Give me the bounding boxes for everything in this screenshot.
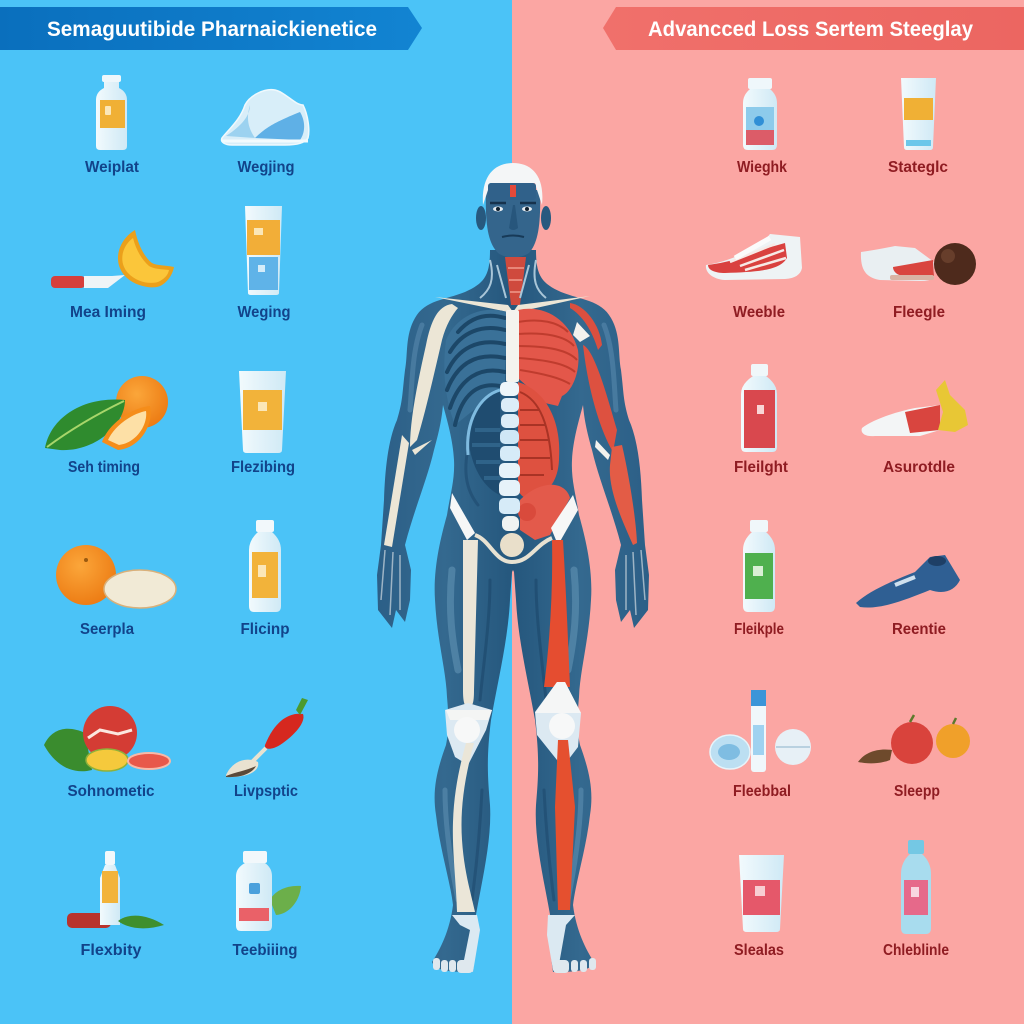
left item: fruit and leaves [44,706,170,800]
right item: green bottle [734,520,784,638]
sternum [506,310,519,382]
red rib cage [518,309,579,406]
right item: white shoe and yellow accent: Asurotdle [883,459,955,476]
right header banner: Advancced Loss Sertem Steeglay [648,18,973,41]
left item: leaf and oranges: Seh timing [68,459,140,476]
right item: tall bottle: Chleblinle [883,942,949,959]
right item: apple and orange: Sleepp [894,783,940,800]
left item: bottle and leaf: Teebiiing [232,942,298,959]
right item: apple and orange [858,715,970,800]
left item: red pepper and spoon: Livpsptic [234,783,298,800]
right item: blue inhaler [856,555,960,638]
left item: tall glass [238,206,290,321]
left item: orange and rice disc: Seerpla [80,621,134,638]
right item: white sneaker and brown fruit: Fleegle [893,304,945,321]
right item: glass: Stateglc [888,159,948,176]
right header banner [603,7,1024,50]
right knee [535,682,581,768]
right item: glass [888,78,948,176]
right item: bottle: Wieghk [737,159,787,176]
right item: pink glass: Slealas [734,942,784,959]
body silhouette left half [377,250,513,972]
left abdominal organs [468,390,500,495]
right arm muscles [570,303,637,545]
left item: bottle and leaf [232,851,301,959]
left item: leaf and oranges [45,376,168,476]
left item: tall glass: Weging [238,304,290,321]
left foot [433,915,480,973]
right item: green bottle: Fleikple [734,621,784,638]
left item: orange and rice disc [56,545,176,638]
throat and neck tendons [480,257,546,305]
muscle shading [410,325,616,900]
left rib cage [444,310,507,425]
left item: fruit and leaves: Sohnometic [68,783,155,800]
collarbones [435,296,590,312]
right item: striped sneaker: Weeble [733,304,785,321]
red intestines [518,382,570,540]
left arm bones [384,304,458,547]
left item: blue shoe [222,90,309,176]
panel: right pink background [512,0,1024,1024]
right thigh muscle [544,540,570,687]
left knee [445,703,492,765]
panel: left blue background [0,0,512,1024]
left item: juice glass [231,371,295,476]
left shin bone [453,743,475,912]
left item: blue shoe: Wegjing [238,159,294,176]
left header banner: Semaguutibide Pharnaickienetice [47,18,377,41]
right item: pink glass [734,855,784,959]
left item: small bottle, capsule and leaf: Flexbity [80,942,142,959]
body silhouette right half [513,250,649,972]
spine [499,382,520,531]
head [476,163,551,258]
left item: spoon and orange wedge [51,230,174,321]
right item: red bottle [734,364,789,476]
hands [381,550,645,615]
left femur [463,540,478,707]
right shin muscle [555,740,575,910]
right item: striped sneaker [706,234,802,321]
right item: tall bottle [883,840,949,959]
left item: spoon and orange wedge: Mea Iming [70,304,146,321]
left item: small bottle, capsule and leaf [67,851,164,959]
right item: pills and tube [710,690,811,800]
left item: bottle: Weiplat [85,159,140,176]
right item: white sneaker and brown fruit [861,243,976,321]
right foot [547,915,596,973]
right item: pills and tube: Fleebbal [733,783,791,800]
right item: red bottle: Fleilght [734,459,789,476]
right item: bottle [737,78,787,176]
right item: white shoe and yellow accent [862,380,968,476]
right item: blue inhaler: Reentie [892,621,946,638]
pelvis and hip straps [450,493,578,562]
left item: juice glass: Flezibing [231,459,295,476]
left item: orange label bottle: Flicinp [240,621,290,638]
left item: bottle [85,75,140,176]
left item: orange label bottle [240,520,290,638]
left header banner [0,7,422,50]
central anatomy figure [377,163,649,973]
left item: red pepper and spoon [226,698,308,800]
